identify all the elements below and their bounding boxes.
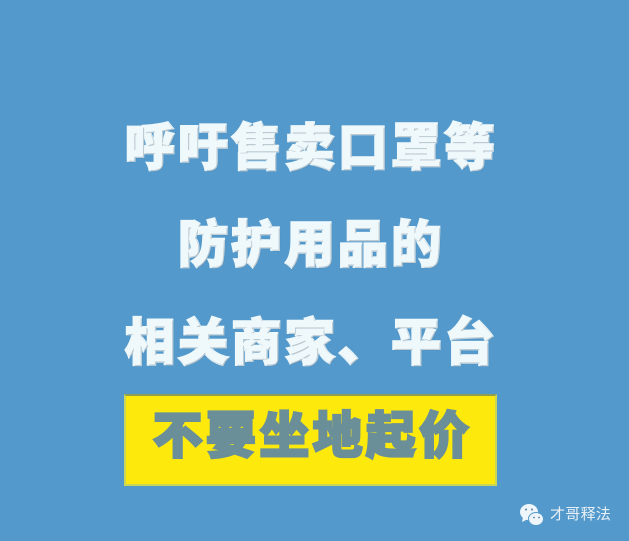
- heading line 3: 相关商家、平台: [125, 315, 498, 371]
- callout text: 不要坐地起价: [153, 408, 472, 464]
- heading line 2: 防护用品的: [178, 217, 445, 273]
- watermark text: 才哥释法: [550, 506, 611, 523]
- icon: chat bubbles: [520, 504, 543, 525]
- heading line 1: 呼吁售卖口罩等: [125, 120, 498, 176]
- watermark: [520, 504, 611, 525]
- callout: yellow banner: [124, 394, 497, 486]
